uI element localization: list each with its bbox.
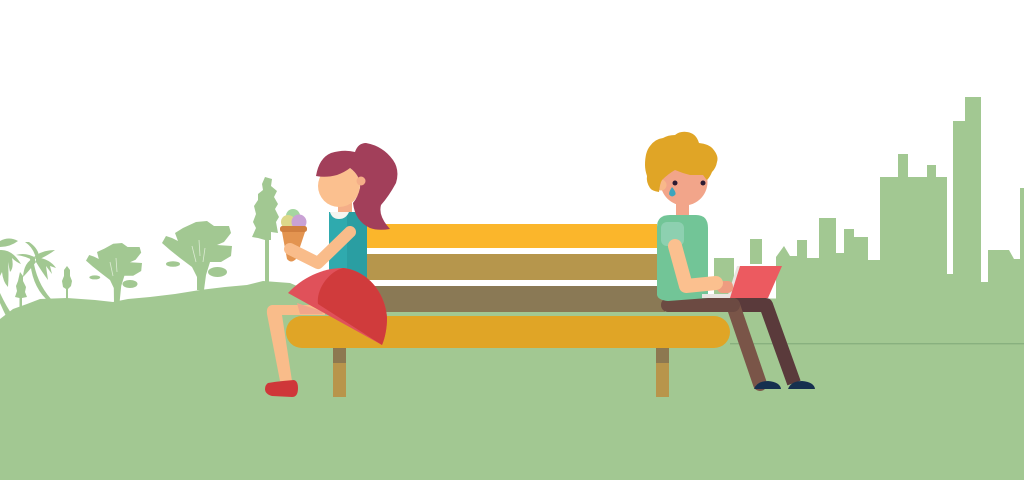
back slat bottom bbox=[375, 286, 665, 312]
girl torso shade bbox=[347, 212, 367, 280]
small conifer left bbox=[15, 272, 27, 307]
seat bbox=[286, 316, 730, 348]
tree slits bbox=[110, 240, 205, 276]
left leg bbox=[333, 348, 346, 397]
small conifer right bbox=[62, 266, 72, 299]
girl shoe bbox=[265, 380, 298, 397]
girl skirt shade bbox=[318, 268, 387, 345]
girl collar bbox=[330, 212, 349, 219]
boy neck bbox=[676, 204, 689, 216]
girl face bbox=[318, 165, 360, 207]
boy near shin bbox=[733, 305, 760, 384]
ice cream bbox=[280, 209, 307, 262]
girl thigh shade bbox=[297, 303, 324, 314]
girl torso bbox=[329, 212, 367, 280]
boy shoes bbox=[754, 381, 815, 389]
tall conifer bbox=[252, 177, 279, 282]
back slat middle bbox=[367, 254, 657, 280]
girl arm bbox=[290, 232, 350, 263]
bench bbox=[286, 224, 730, 397]
boy arm bbox=[675, 246, 716, 286]
girl hair bbox=[316, 143, 397, 230]
back slat top bbox=[367, 224, 657, 248]
boy near thigh bbox=[668, 298, 733, 312]
laptop bbox=[702, 266, 782, 298]
boy hair bbox=[645, 132, 718, 192]
boy torso bbox=[657, 215, 708, 301]
girl neck bbox=[338, 200, 352, 212]
palm tree bbox=[16, 242, 56, 299]
girl ear bbox=[356, 176, 366, 186]
boy face bbox=[660, 158, 708, 206]
girl bbox=[265, 143, 397, 397]
trees bbox=[0, 177, 279, 318]
boy eyes bbox=[672, 180, 706, 186]
boy ear bbox=[656, 180, 666, 190]
laptop backdrop bbox=[734, 264, 776, 298]
girl skirt bbox=[288, 268, 387, 345]
city skyline bbox=[714, 97, 1024, 300]
boy far leg bbox=[733, 305, 794, 383]
right leg bbox=[656, 348, 669, 397]
leafy tree large bbox=[162, 221, 232, 290]
palm tree left bbox=[0, 238, 21, 318]
boy sleeve bbox=[661, 222, 684, 246]
boy tear bbox=[669, 187, 676, 196]
girl leg bbox=[267, 305, 325, 381]
boy far hand bbox=[717, 281, 733, 293]
boy bbox=[645, 132, 815, 389]
ground and hill bbox=[0, 281, 1024, 480]
horizon line bbox=[730, 342, 1024, 345]
leafy tree small bbox=[86, 243, 142, 302]
